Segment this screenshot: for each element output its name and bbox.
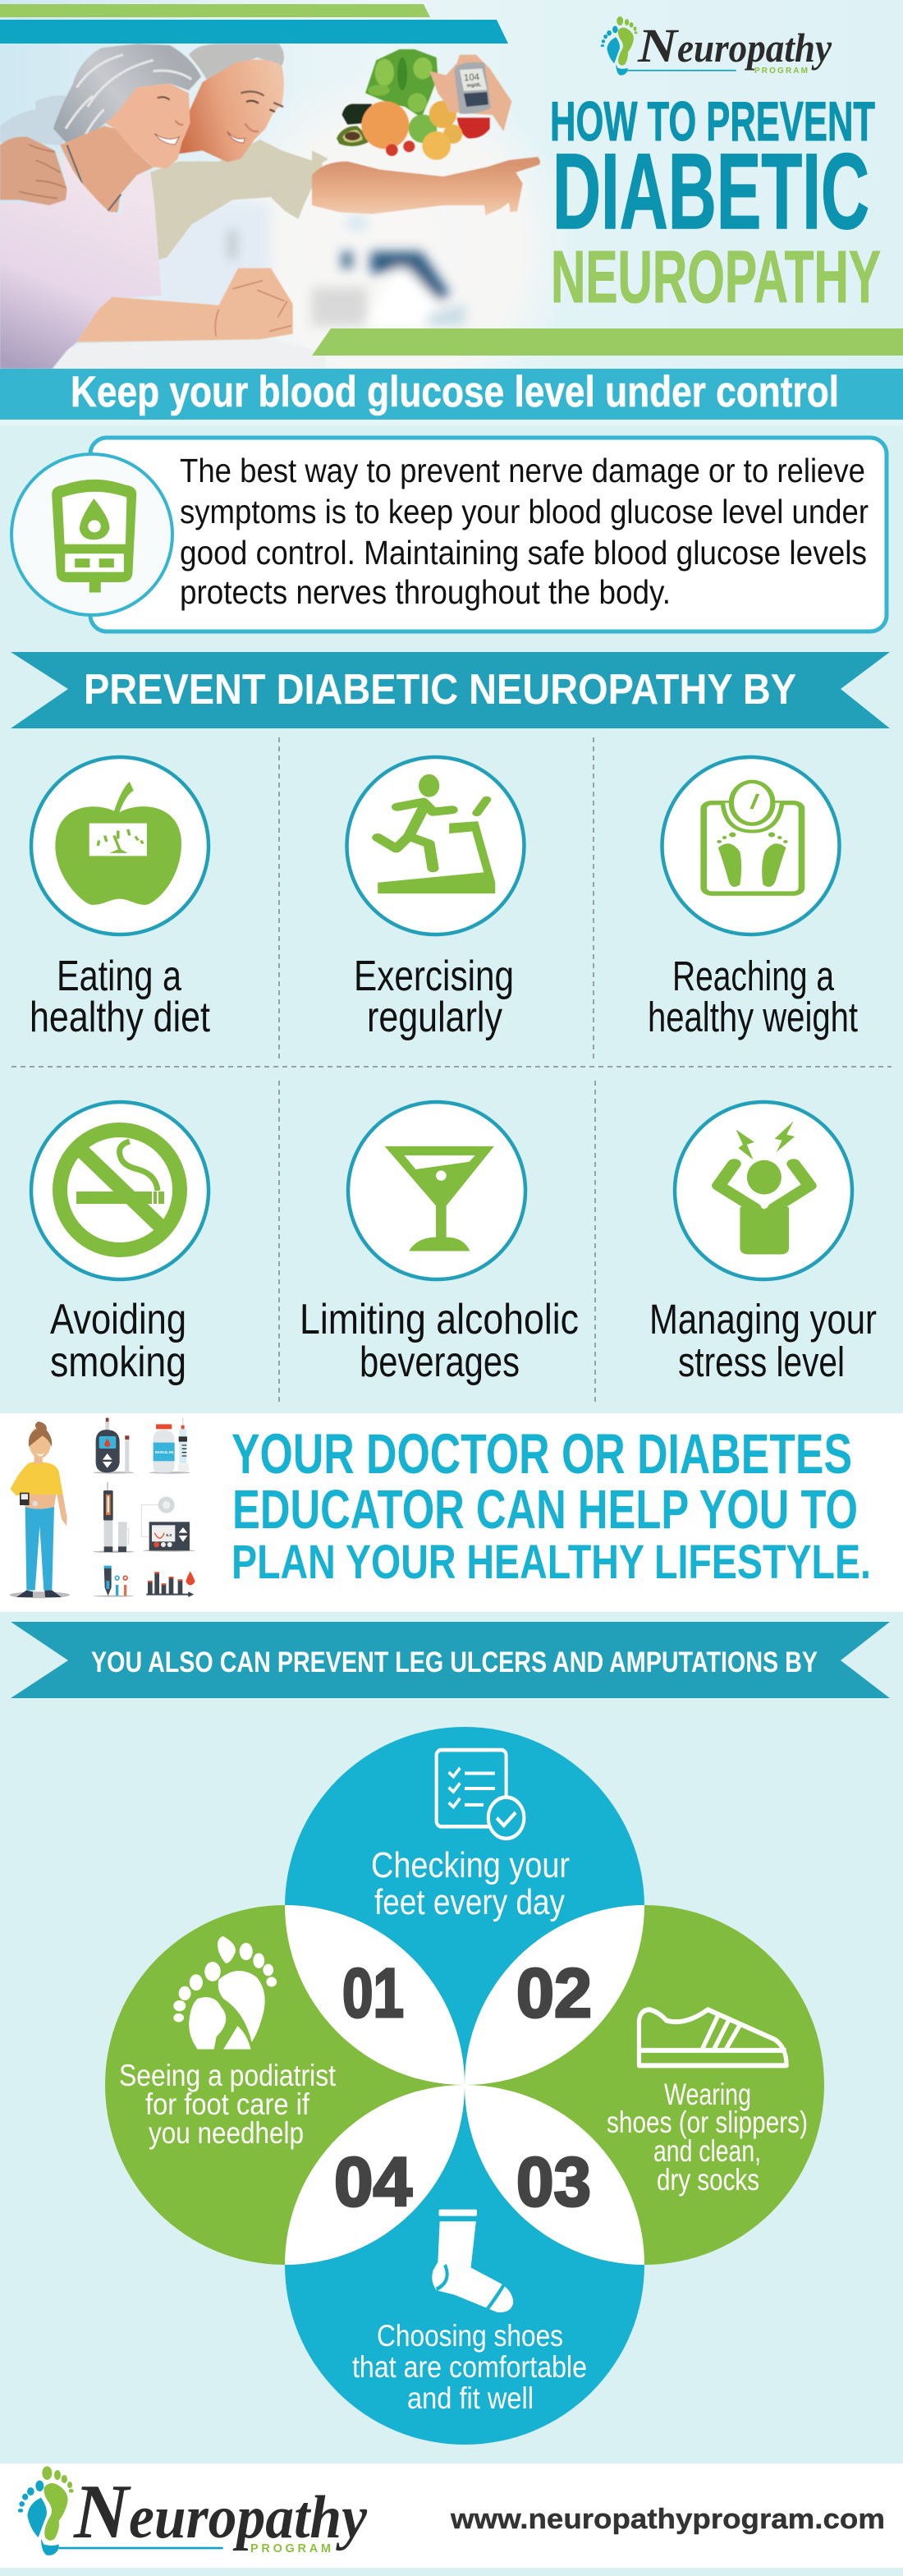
item: managing your stress level bbox=[649, 1102, 877, 1385]
item: reaching a healthy weight bbox=[648, 757, 858, 1040]
step 03: choosing comfortable shoes: that are comfortable bbox=[352, 2350, 587, 2384]
banner: prevent diabetic neuropathy by: PREVENT DIABETIC NEUROPATHY BY bbox=[84, 666, 796, 714]
step numbers bbox=[334, 1954, 592, 2220]
banner: leg ulcers and amputations bbox=[11, 1622, 890, 1698]
banner: prevent diabetic neuropathy by bbox=[11, 652, 890, 728]
item: limiting alcoholic beverages: Limiting alcoholic bbox=[300, 1296, 579, 1343]
top blue ribbon bbox=[0, 20, 508, 44]
item: limiting alcoholic beverages: beverages bbox=[360, 1339, 520, 1386]
petal diagram: four foot-care steps bbox=[105, 1727, 824, 2445]
item: avoiding smoking: smoking bbox=[50, 1339, 186, 1386]
website url: www.neuropathyprogram.com bbox=[450, 2504, 885, 2535]
item: exercising regularly: regularly bbox=[367, 994, 502, 1041]
logo: Neuropathy Program bbox=[601, 16, 832, 76]
title bbox=[550, 90, 881, 319]
illustration: woman with diabetes devices: 6.0 bbox=[166, 1533, 172, 1538]
doctor help message bbox=[231, 1422, 871, 1589]
footer logo bbox=[18, 2466, 368, 2555]
footer logo: PROGRAM bbox=[250, 2542, 331, 2555]
step 03: choosing comfortable shoes: and fit well bbox=[407, 2381, 534, 2415]
logo: Neuropathy Program: N bbox=[637, 19, 679, 72]
item: eating a healthy diet: healthy diet bbox=[30, 994, 210, 1041]
pointing arm and food: 104 bbox=[464, 72, 479, 83]
item: eating a healthy diet: Eating a bbox=[57, 953, 181, 1000]
step 02: wearing shoes and clean socks: and clean, bbox=[653, 2134, 761, 2168]
footer band bbox=[0, 2464, 903, 2568]
step 04: seeing a podiatrist: for foot care if bbox=[145, 2087, 310, 2121]
header background bbox=[0, 0, 903, 369]
logo: Neuropathy Program: europathy bbox=[677, 25, 832, 71]
footer logo: europathy bbox=[129, 2484, 368, 2551]
step 03: choosing comfortable shoes bbox=[352, 2210, 587, 2415]
icon: glucose meter bbox=[11, 454, 172, 615]
step 02: wearing shoes and clean socks bbox=[607, 2009, 808, 2197]
step 03: choosing comfortable shoes: Choosing shoes bbox=[377, 2319, 563, 2353]
pointing arm and food bbox=[312, 49, 540, 215]
header photo: older couple with food and glucose meter bbox=[0, 44, 575, 369]
item: managing your stress level: stress level bbox=[678, 1339, 845, 1385]
footer logo: N bbox=[73, 2469, 131, 2555]
step 02: wearing shoes and clean socks: shoes (or slippers) bbox=[607, 2105, 808, 2139]
bottom green ribbon bbox=[312, 328, 903, 356]
panel: doctor or educator help bbox=[0, 1413, 903, 1612]
item: exercising regularly bbox=[346, 757, 524, 1041]
illustration: woman with diabetes devices bbox=[10, 1418, 195, 1598]
step numbers: 03 bbox=[516, 2143, 591, 2220]
item: reaching a healthy weight: Reaching a bbox=[672, 953, 834, 999]
illustration: woman with diabetes devices: INSULIN bbox=[155, 1450, 174, 1454]
step 02: wearing shoes and clean socks: Wearing bbox=[664, 2078, 751, 2111]
item: avoiding smoking: Avoiding bbox=[50, 1296, 186, 1343]
step 01: checking your feet every day: Checking your bbox=[371, 1845, 570, 1885]
step 01: checking your feet every day bbox=[371, 1750, 570, 1922]
blurred room background bbox=[158, 204, 465, 326]
step 02: wearing shoes and clean socks: dry socks bbox=[657, 2163, 759, 2197]
panel: intro text box: protects nerves throughout the body. bbox=[180, 573, 671, 611]
step 04: seeing a podiatrist bbox=[119, 1936, 337, 2150]
step 04: seeing a podiatrist: you needhelp bbox=[149, 2116, 304, 2150]
step numbers: 02 bbox=[516, 1954, 592, 2032]
step 04: seeing a podiatrist: Seeing a podiatrist bbox=[119, 2059, 337, 2092]
step 01: checking your feet every day: feet every day bbox=[374, 1882, 565, 1922]
item: limiting alcoholic beverages bbox=[300, 1102, 579, 1386]
step numbers: 01 bbox=[342, 1954, 404, 2032]
couple bbox=[0, 44, 326, 369]
step numbers: 04 bbox=[334, 2143, 412, 2220]
panel: intro text box bbox=[90, 438, 887, 631]
top green ribbon bbox=[0, 4, 430, 17]
pointing arm and food: mg/dL bbox=[466, 83, 482, 89]
item: avoiding smoking bbox=[31, 1102, 209, 1386]
item: exercising regularly: Exercising bbox=[354, 953, 514, 1000]
logo: Neuropathy Program: PROGRAM bbox=[754, 67, 808, 76]
item: eating a healthy diet bbox=[30, 757, 210, 1041]
